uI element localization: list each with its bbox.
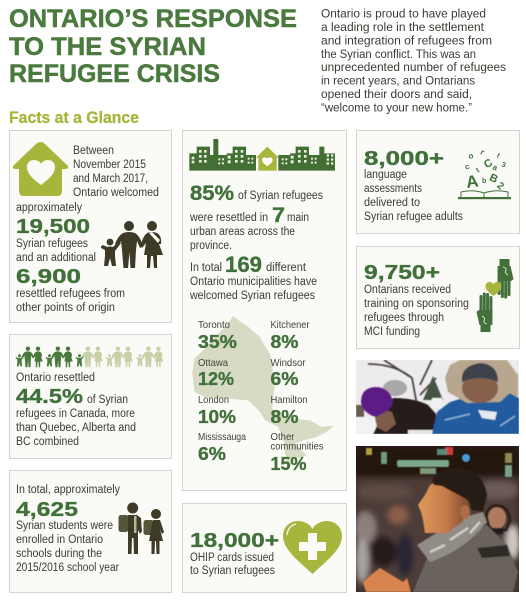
- number: 169: 169: [225, 252, 262, 277]
- text: ohip cards: OHIP cards issued: [190, 552, 274, 564]
- number: 6,900: 6,900: [16, 266, 81, 288]
- icon: house with heart: [13, 142, 68, 196]
- panel: language assessments: [356, 130, 520, 234]
- title: ONTARIO’S RESPONSE: [9, 5, 297, 33]
- number: 9,750+: 9,750+: [364, 261, 440, 284]
- intro text: opened their doors and said,: [321, 87, 472, 101]
- text: resettled refugees: [16, 288, 125, 314]
- text: ohip cards: [190, 552, 275, 577]
- text: resettled refugees: other points of origin: [16, 302, 115, 314]
- city stats: left column: London: [198, 394, 229, 406]
- panel: share of refugees: [10, 334, 172, 458]
- text: comparison: than Quebec, Alberta and: [16, 422, 136, 434]
- text: arrivals intro: and March 2017,: [73, 173, 148, 185]
- photo: children in snow: [356, 360, 519, 434]
- title: [9, 5, 297, 88]
- photo: man in crowd: [354, 446, 520, 592]
- icon: book with letters: A: [465, 171, 480, 192]
- text: urban areas: urban areas across the: [190, 226, 295, 238]
- panel: arrivals: [10, 130, 172, 322]
- text: of syrian refugees: were resettled in: [189, 212, 268, 224]
- text: resettled refugees: resettled refugees from: [16, 288, 125, 300]
- intro text: the Syrian conflict. This was an: [321, 47, 476, 61]
- text: language assessments: language: [364, 169, 407, 181]
- text: comparison: BC combined: [16, 436, 79, 448]
- city stats: right column: [270, 319, 324, 474]
- city stats: right column: Windsor: [270, 357, 306, 369]
- city stats: right column: 15%: [270, 453, 306, 474]
- text: ontarians trained: [364, 284, 469, 338]
- icon: book with letters: 2: [494, 180, 506, 193]
- text: comparison: [16, 394, 136, 448]
- intro text: unprecedented number of refugees: [321, 60, 506, 74]
- city stats: right column: communities: [270, 440, 324, 452]
- number: 4,625: 4,625: [16, 499, 78, 521]
- text: students enrolled: Syrian students were: [16, 520, 113, 532]
- icon: book with letters: t: [475, 167, 481, 174]
- text: syrian refugees: [16, 238, 96, 264]
- text: students enrolled: enrolled in Ontario: [16, 534, 103, 546]
- city stats: right column: 6%: [270, 368, 298, 389]
- icon: family: [101, 221, 163, 268]
- intro text: [321, 6, 506, 114]
- intro text: Ontario is proud to have played: [321, 6, 486, 20]
- text: urban areas: [190, 212, 309, 274]
- title: REFUGEE CRISIS: [9, 60, 220, 88]
- text: ontarians trained: training on sponsoring: [364, 298, 469, 310]
- icon: book with letters: B: [487, 172, 500, 186]
- city stats: left column: 6%: [198, 443, 226, 464]
- text: language assessments: Syrian refugee adults: [364, 211, 463, 223]
- text: urban areas: province.: [190, 240, 232, 252]
- text: students enrolled: schools during the: [16, 548, 102, 560]
- text: urban areas: main: [287, 212, 309, 224]
- city stats: right column: 8%: [270, 406, 298, 427]
- city stats: left column: 12%: [198, 368, 234, 389]
- city stats: left column: 10%: [198, 406, 236, 427]
- panel: sponsorship training: [356, 246, 520, 348]
- text: syrian refugees: Syrian refugees: [16, 238, 88, 250]
- icon: book with letters: c: [463, 162, 471, 172]
- panel: ohip cards: [182, 504, 346, 592]
- number: 8,000+: 8,000+: [364, 147, 444, 170]
- text: municipalities: [189, 262, 317, 302]
- icon: book with letters: o: [467, 151, 475, 161]
- city stats: left column: Ottawa: [198, 357, 228, 369]
- text: language assessments: assessments: [364, 183, 422, 195]
- city stats: right column: Hamilton: [270, 394, 308, 406]
- text: students enrolled: [16, 520, 119, 574]
- icon: book with letters: b: [482, 178, 486, 185]
- text: ohip cards: to Syrian refugees: [190, 565, 275, 577]
- icon: book with letters: C: [482, 157, 495, 171]
- number: 18,000+: 18,000+: [190, 529, 279, 552]
- title: TO THE SYRIAN: [9, 33, 206, 61]
- number: 19,500: 19,500: [16, 216, 90, 238]
- text: language assessments: [364, 169, 463, 223]
- city stats: right column: 8%: [270, 331, 298, 352]
- text: ontarians trained: refugees through: [364, 312, 444, 324]
- city stats: right column: Kitchener: [270, 319, 310, 331]
- text: arrivals intro: [16, 145, 159, 214]
- heading: facts at a glance: Facts at a Glance: [9, 109, 139, 127]
- icon: book with letters: [458, 148, 511, 199]
- text: arrivals intro: approximately: [16, 202, 82, 214]
- text: of syrian refugees: of Syrian refugees: [238, 190, 323, 202]
- panel: students: [10, 470, 172, 592]
- intro text: “welcome to your new home.”: [321, 100, 472, 114]
- number: 44.5%: 44.5%: [16, 385, 83, 408]
- intro text: and integration of refugees from: [321, 34, 492, 48]
- icon: row of families: [16, 347, 163, 367]
- text: arrivals intro: November 2015: [73, 159, 146, 171]
- text: municipalities: Ontario municipalities have: [190, 276, 317, 288]
- icon: students with backpacks: [118, 502, 164, 554]
- text: municipalities: welcomed Syrian refugees: [189, 290, 315, 302]
- text: comparison: of Syrian: [87, 394, 128, 406]
- text: students enrolled: 2015/2016 school year: [16, 562, 119, 574]
- icon: city skyline with home: [189, 139, 335, 171]
- text: in total: In total, approximately: [16, 484, 120, 496]
- text: ontario resettled: Ontario resettled: [16, 372, 95, 384]
- text: arrivals intro: Ontario welcomed: [73, 187, 159, 199]
- city stats: left column: Mississauga: [198, 431, 246, 443]
- city stats: left column: Toronto: [198, 319, 230, 331]
- intro text: a leading role in the settlement: [321, 20, 485, 34]
- icon: hands and heart: [476, 259, 514, 332]
- map of ontario: [192, 316, 334, 466]
- text: ontarians trained: MCI funding: [364, 326, 420, 338]
- icon: book with letters: t: [495, 152, 501, 160]
- icon: book with letters: 3: [500, 161, 507, 169]
- text: ontarians trained: Ontarians received: [364, 284, 451, 296]
- number: 7: 7: [272, 204, 285, 227]
- text: of syrian refugees: [189, 190, 323, 224]
- intro text: in recent years, and Ontarians: [321, 74, 475, 88]
- text: municipalities: different: [266, 262, 307, 274]
- icon: heart with cross: [283, 521, 342, 574]
- icon: book with letters: r: [479, 148, 486, 157]
- text: syrian refugees: and an additional: [16, 252, 96, 264]
- text: comparison: refugees in Canada, more: [16, 408, 135, 420]
- city stats: left column: 35%: [198, 331, 237, 352]
- number: 85%: 85%: [190, 182, 234, 205]
- text: arrivals intro: Between: [73, 145, 114, 157]
- text: language assessments: delivered to: [364, 197, 420, 209]
- text: urban areas: In total: [190, 262, 222, 274]
- city stats: left column: [198, 319, 246, 464]
- city stats: right column: Other: [270, 431, 295, 443]
- panel: resettlement: [182, 130, 346, 490]
- icon: book with letters: a: [491, 163, 499, 173]
